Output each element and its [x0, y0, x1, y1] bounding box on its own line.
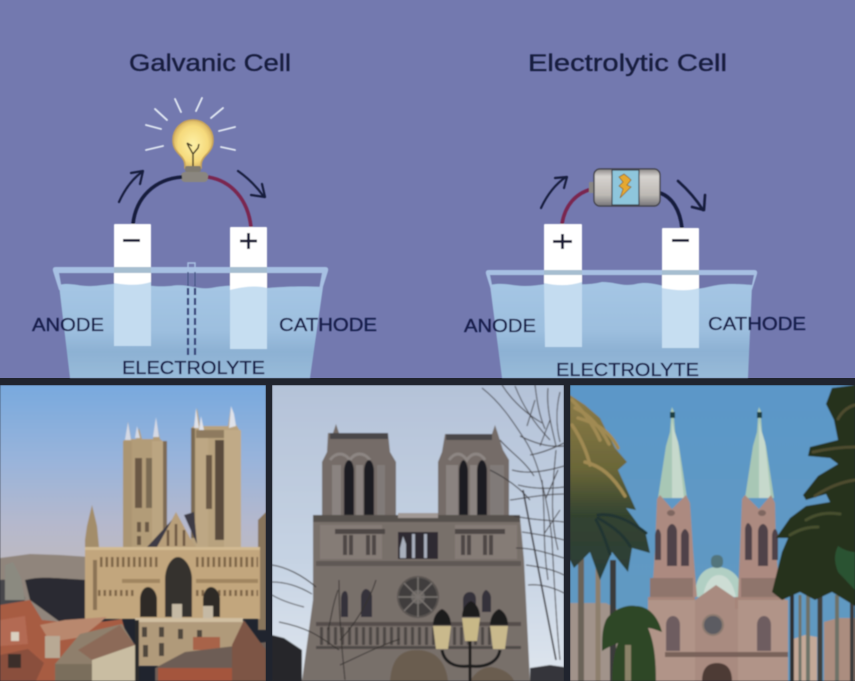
- wire: anode wire: [562, 189, 592, 224]
- label: anode: ANODE: [32, 315, 104, 335]
- red brick roofs: [0, 600, 134, 681]
- beaker: [53, 267, 328, 378]
- salt bridge: [188, 263, 195, 355]
- photo: São Paulo cathedral: [570, 385, 855, 681]
- icon: light bulb: [173, 120, 213, 182]
- arrow: left: [541, 177, 567, 208]
- body: [302, 517, 530, 681]
- central gable: [162, 512, 192, 548]
- right palms: [772, 385, 855, 681]
- bare tree right: [482, 385, 564, 660]
- arrow: right: [678, 181, 705, 210]
- lower windows and gallery: [341, 589, 491, 617]
- wire: cathode wire: [660, 193, 682, 228]
- sign: plus: [240, 233, 257, 249]
- left tower: [648, 495, 697, 609]
- left turret: [85, 505, 99, 547]
- left dark buildings: [272, 635, 302, 681]
- electrode: anode: [544, 224, 582, 347]
- wire: cathode wire: [208, 177, 251, 227]
- electrode: anode: [114, 224, 151, 346]
- street lamp: [433, 601, 508, 681]
- label: electrolyte: ELECTROLYTE: [556, 360, 699, 380]
- label: electrolyte: ELECTROLYTE: [122, 358, 265, 378]
- right tower: [191, 406, 241, 547]
- sign: minus: [123, 239, 140, 242]
- photo: Lincoln cathedral: [0, 385, 266, 681]
- sign: plus: [553, 234, 572, 249]
- electrode: cathode: [230, 227, 267, 349]
- foreground right roofs: [135, 620, 139, 681]
- lower facade: [135, 618, 243, 666]
- facade: [85, 547, 260, 619]
- portal: [390, 650, 448, 681]
- photo: Notre-Dame cathedral: [272, 385, 564, 681]
- rose window: [398, 577, 438, 617]
- panel: galvanic cell: [32, 50, 377, 378]
- sign: minus: [672, 239, 689, 242]
- left palms: [570, 395, 662, 681]
- central opening: [398, 532, 438, 559]
- small foreground palm: [602, 606, 662, 681]
- slate roof building: [55, 624, 135, 664]
- right spire: [745, 407, 774, 498]
- lower facade: [648, 600, 695, 681]
- heading: Electrolytic Cell: Electrolytic Cell: [528, 50, 727, 77]
- panel: electrolytic cell: [464, 50, 806, 380]
- right buildings: [530, 665, 564, 681]
- bare tree left: [272, 565, 400, 680]
- icon: light rays: [146, 98, 235, 150]
- label: cathode: CATHODE: [279, 315, 377, 335]
- arches: [165, 557, 192, 617]
- electrode: cathode: [662, 228, 699, 348]
- heading: Galvanic Cell: Galvanic Cell: [129, 50, 291, 77]
- wire: anode wire: [133, 177, 182, 224]
- distant trees: [0, 554, 86, 622]
- label: cathode: CATHODE: [708, 314, 806, 334]
- center facade: [695, 585, 738, 681]
- beaker: [486, 270, 757, 378]
- gallery bays: [320, 525, 517, 559]
- left tower: [123, 417, 167, 547]
- background buildings: [570, 603, 624, 681]
- arrow: right: [238, 171, 265, 197]
- towers: [322, 424, 509, 517]
- label: anode: ANODE: [464, 316, 536, 336]
- portal: [702, 663, 732, 681]
- icon: battery: [589, 169, 660, 206]
- right tower: [735, 495, 785, 609]
- dome: [695, 555, 743, 597]
- arrow: left: [119, 171, 143, 202]
- left spire: [658, 407, 687, 498]
- arcade bands: [100, 557, 258, 567]
